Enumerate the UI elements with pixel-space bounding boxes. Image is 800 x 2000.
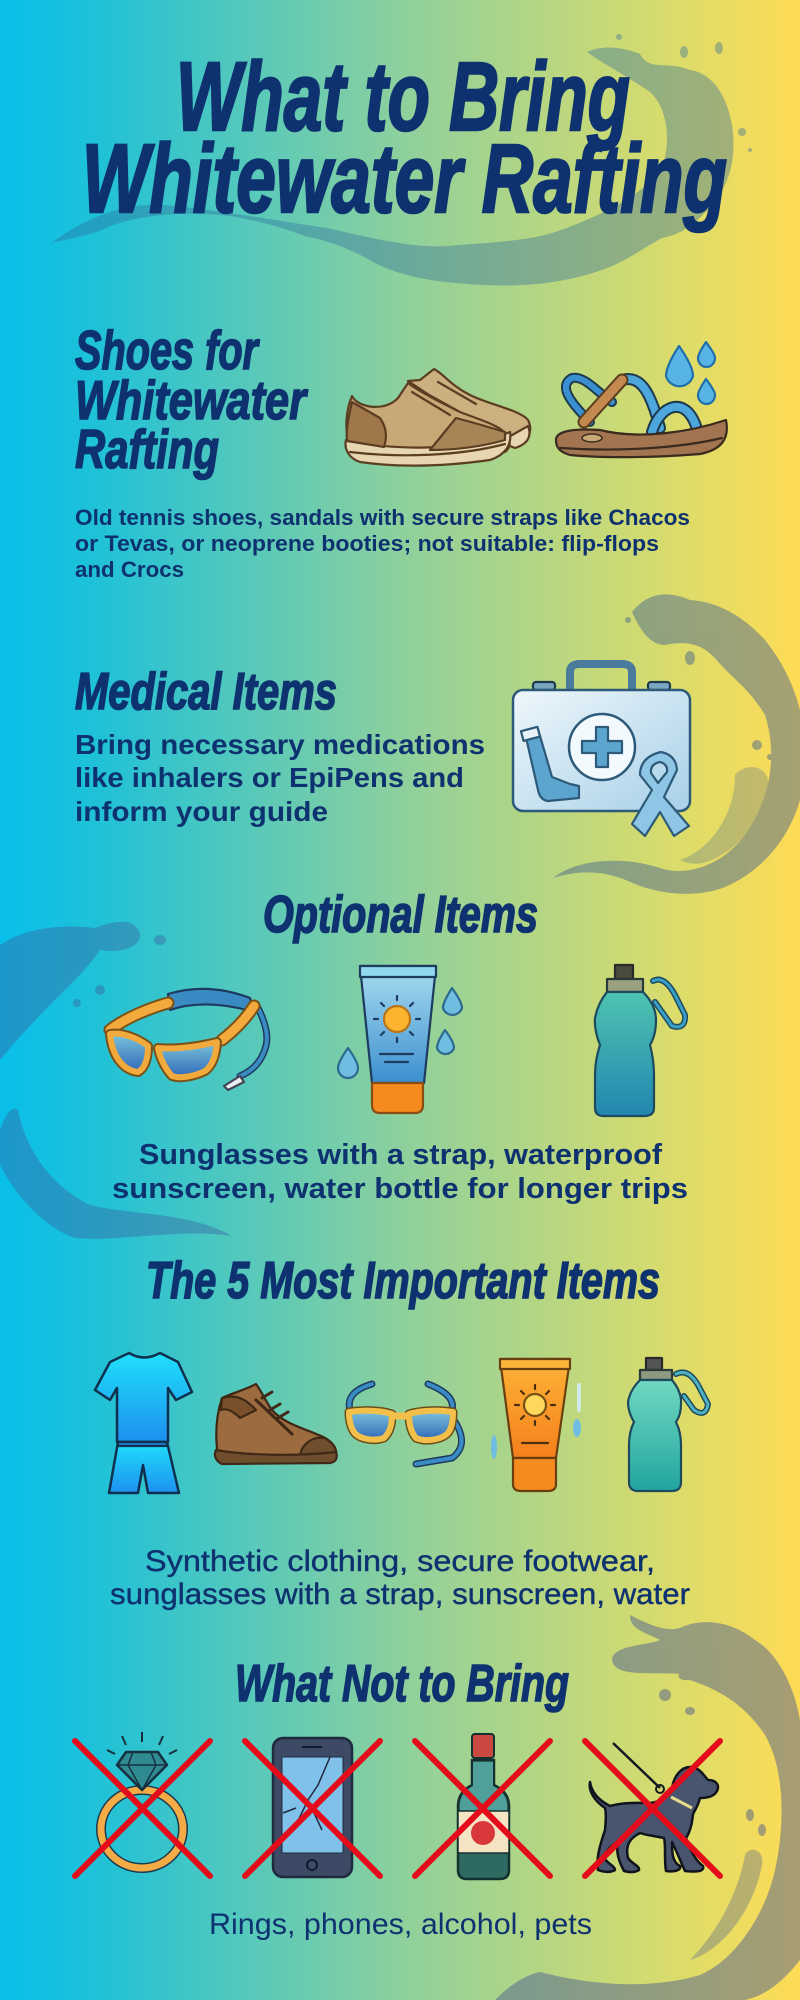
caption: what not to bring: Rings, phones, alcohol, pets (209, 1908, 592, 1941)
heading: shoes: Rafting (75, 418, 219, 480)
wave splash: left (0, 922, 232, 1239)
wave splash: right middle (553, 594, 800, 894)
body text: medical: like inhalers or EpiPens and (75, 762, 464, 793)
body text: optional: Sunglasses with a strap, waterproof (139, 1139, 662, 1171)
icon: orange sunscreen tube (491, 1359, 581, 1491)
title (82, 42, 727, 233)
heading: shoes: Shoes for (75, 319, 260, 381)
heading: shoes (75, 319, 308, 480)
title: What to Bring (176, 42, 630, 151)
body text: medical: Bring necessary medications (75, 729, 485, 760)
icon: shirt and shorts (95, 1353, 192, 1493)
body text: important items: Synthetic clothing, secure footwear, (145, 1545, 655, 1578)
body text: shoes (75, 505, 690, 582)
icon: hiking boot (215, 1384, 337, 1464)
icon: crossed out ring (75, 1732, 210, 1876)
heading: medical items: Medical Items (75, 663, 337, 721)
icon: crossed out dog on leash (585, 1741, 720, 1876)
body text: medical (75, 729, 485, 827)
body text: important items (110, 1545, 690, 1611)
icon: sandal with water drops (556, 342, 727, 457)
icon: sunglasses with strap (110, 989, 267, 1090)
heading: shoes: Whitewater (75, 369, 308, 431)
icon: water bottle with carabiner (595, 965, 685, 1116)
body text: important items: sunglasses with a strap, sunscreen, water (110, 1578, 690, 1611)
icon: crossed out alcohol bottle (415, 1734, 550, 1879)
icon: sunglasses (349, 1384, 462, 1464)
icon: blue sunscreen tube with drops (338, 966, 462, 1113)
wave splash: bottom right (495, 1615, 800, 2000)
body text: medical: inform your guide (75, 796, 328, 827)
heading: what not to bring: What Not to Bring (235, 1655, 569, 1713)
icon: sneakers (346, 369, 530, 466)
body text: shoes: or Tevas, or neoprene booties; not suitable: flip-flops (75, 531, 659, 556)
body text: optional: sunscreen, water bottle for longer trips (112, 1173, 688, 1205)
heading: optional items: Optional Items (263, 886, 538, 944)
wave splash: top (51, 34, 752, 285)
icon: teal water bottle (628, 1358, 708, 1491)
icon: crossed out phone (245, 1738, 380, 1877)
body text: shoes: and Crocs (75, 557, 184, 582)
body text: shoes: Old tennis shoes, sandals with secure straps like Chacos (75, 505, 690, 530)
icon: first aid kit (513, 664, 690, 836)
body text: optional (112, 1139, 688, 1205)
